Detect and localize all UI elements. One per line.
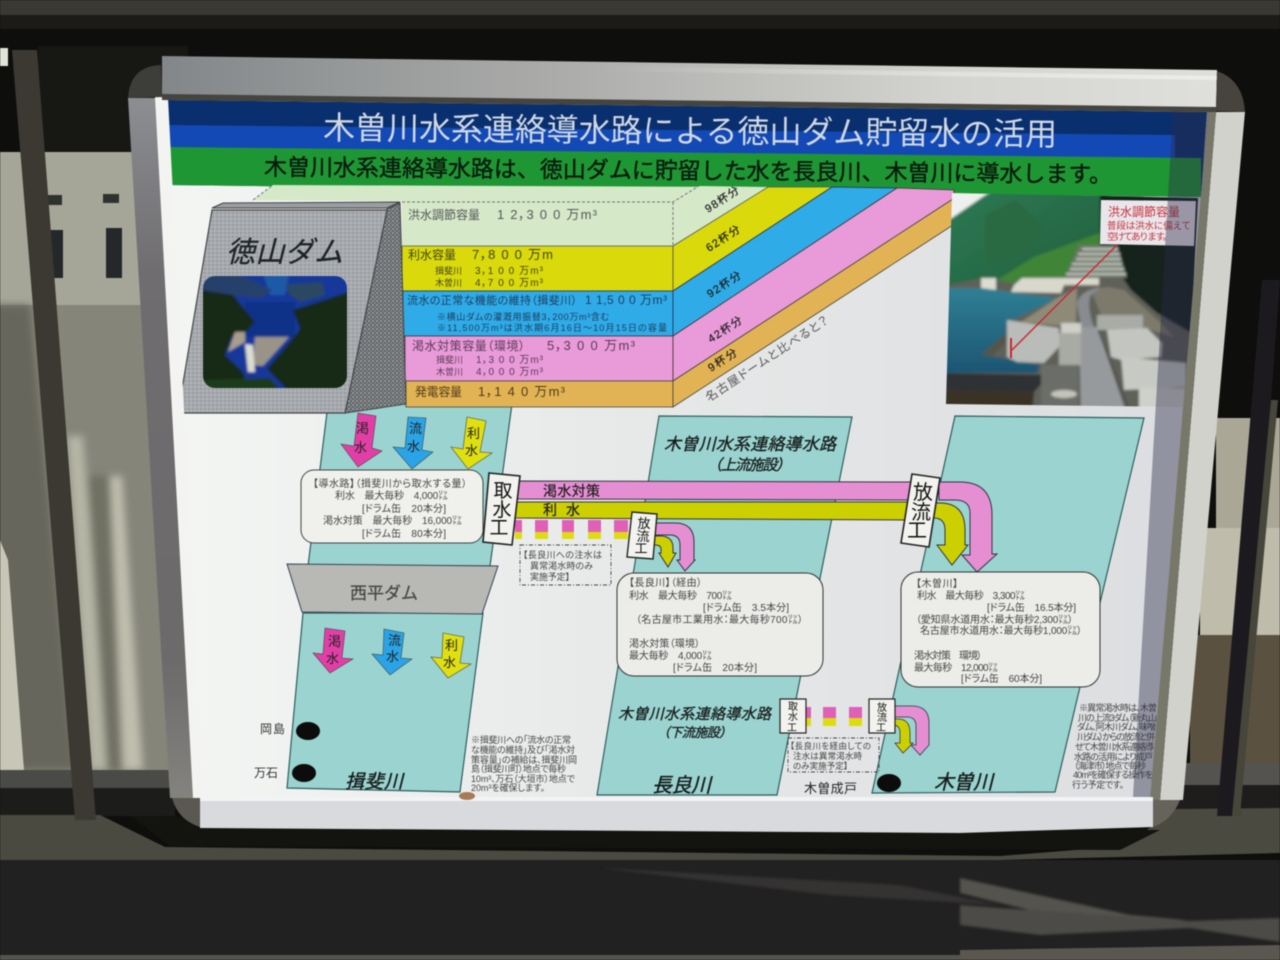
Kiso River info box: 渇水対策 環境）	[914, 649, 982, 662]
heading: upstream facilities: （上流施設）	[707, 457, 791, 474]
capacity labels: 4，7 0 0 万m³	[475, 278, 544, 289]
capacity labels: ※11,500万m³は洪水期6月16日～10月15日の容量	[437, 322, 667, 333]
capacity labels: 渇水対策容量（環境）	[412, 339, 525, 353]
outlet works box, Nagara	[627, 512, 657, 559]
Ibi River intake box: 利水 最大毎秒 4,000㍑	[335, 489, 448, 502]
conveyance channel pipes: 利 水	[543, 502, 580, 518]
dashed section toward Nagara River	[515, 520, 628, 539]
capacity labels: 揖斐川	[436, 354, 463, 365]
intake works box, lower: 取	[788, 702, 798, 713]
dam aerial photo	[202, 275, 348, 389]
Ibi River flow arrows, lower	[313, 628, 471, 678]
Ibi River intake box: 渇水対策 最大毎秒 16,000㍑	[323, 514, 462, 527]
outlet works box, Nagara: 流	[636, 529, 650, 544]
shadow cast by the right rail	[1133, 110, 1209, 797]
Nagara River info box: 渇水対策（環境）	[629, 637, 700, 650]
red arrow	[1011, 245, 1117, 358]
Nagara River info box: [ドラム缶 3.5本分]	[703, 601, 789, 614]
note: Kiso River supply: 行う予定です。	[1072, 779, 1124, 790]
note: Kiso River supply: 水路の活用により成戸	[1074, 751, 1153, 762]
Ibi River flow arrows, lower: 渇	[328, 634, 341, 649]
Ibi River flow arrows, lower: 水	[326, 651, 339, 666]
Tokuyama Dam block	[178, 202, 406, 413]
Ibi River flow arrows, upper: 流	[409, 421, 422, 436]
Kiso River info box: 最大毎秒 12,000㍑	[914, 661, 998, 674]
capacity labels: 1，3 0 0 万m³	[476, 355, 544, 366]
callout note	[1100, 200, 1196, 246]
note: Nagara River discharge: 異常渇水時のみ	[530, 560, 593, 571]
dam photo with flood capacity callout	[945, 192, 1198, 408]
Kiso River info box: 利水 最大毎秒 3,300㍑	[917, 589, 1025, 602]
Kiso River info box: [ドラム缶 16.5本分]	[987, 601, 1076, 614]
note: Ibi River supply: 策容量」の補給は、揖斐川岡	[471, 754, 577, 765]
capacity labels: 流水の正常な機能の維持（揖斐川）	[407, 293, 577, 307]
Ibi River intake box	[301, 470, 483, 543]
note: Kiso River supply: 40m³を確保する操作を	[1073, 769, 1153, 780]
Nagara River info box: （名古屋市工業用水：最大毎秒700㍑）	[636, 613, 803, 626]
note: Ibi River supply: 10m³、万石（大垣市）地点で	[471, 773, 575, 784]
heading: upstream facilities: 木曽川水系連絡導水路	[664, 435, 838, 454]
note: Ibi River supply: 島（揖斐川町）地点で毎秒	[471, 763, 566, 774]
note: Ibi River supply	[471, 734, 577, 793]
Nishihira Dam	[287, 564, 498, 614]
Kiso River info box: 名古屋市水道用水：最大毎秒1,000㍑）	[920, 624, 1082, 637]
capacity labels: 洪水調節容量	[408, 208, 480, 222]
observation points: 木曽成戸	[804, 781, 857, 796]
note: discharge via Nagara River	[788, 738, 879, 772]
note: Kiso River supply: 川ダム）からの放流と併	[1077, 731, 1155, 742]
capacity labels: 1，1 4 0 万m³	[478, 384, 566, 399]
outlet works box, Nagara: 放	[637, 516, 651, 531]
intake works box, lower: 水	[788, 711, 798, 723]
heading: downstream facilities: 木曽川水系連絡導水路	[618, 706, 773, 723]
callout note: 普段は洪水に備えて	[1107, 220, 1191, 232]
Ibi River flow arrows, lower: 水	[386, 649, 399, 664]
note: Kiso River supply: せて木曽川水系連絡導	[1075, 741, 1154, 752]
Nagoya Dome comparison labels: 92杯分	[704, 268, 744, 301]
river names: 木曽川	[934, 772, 995, 794]
Nishihira Dam: 西平ダム	[350, 584, 418, 603]
note: Kiso River supply	[1072, 702, 1157, 790]
note: discharge via Nagara River: のみ実施予定】	[793, 761, 848, 771]
capacity labels: 木曽川	[435, 277, 462, 288]
intake works box, lower: 工	[787, 723, 797, 734]
outlet works box, lower: 工	[876, 723, 886, 734]
Nagara River info box	[617, 573, 823, 676]
Nagoya Dome comparison labels: 名古屋ドームと比べると？	[702, 313, 831, 405]
Nagoya Dome comparison labels: 98杯分	[702, 183, 742, 216]
Ibi River flow arrows, upper: 水	[354, 440, 367, 455]
Nagara River outlet arrows	[652, 523, 695, 571]
capacity labels: 3，1 0 0 万m³	[475, 266, 544, 277]
river names: 揖斐川	[345, 772, 405, 793]
Nagoya Dome comparison labels: 42杯分	[705, 313, 745, 346]
outlet works box, Nagara: 工	[634, 541, 648, 556]
outlet works box, Kiso: 工	[907, 520, 927, 542]
river names: 長良川	[652, 775, 713, 797]
note: Kiso River supply: ※異常渇水時は、木曽	[1079, 702, 1157, 713]
Nagara River info box: 【長良川】（経由）	[629, 576, 702, 589]
Ibi River flow arrows, upper: 水	[407, 439, 420, 454]
Ibi River intake box: [ドラム缶 20本分]	[362, 502, 446, 515]
capacity labels: 利水容量	[408, 248, 456, 262]
note: Ibi River supply: ※揖斐川への「流水の正常	[471, 734, 571, 745]
Ibi River flow arrows, lower: 水	[443, 655, 456, 670]
heading: upstream facilities	[664, 435, 838, 474]
reservoir capacity stack	[253, 183, 954, 407]
conveyance channel pipes	[512, 481, 911, 520]
title: 木曽川水系連絡導水路による徳山ダム貯留水の活用	[323, 110, 1057, 152]
heading: downstream facilities	[618, 706, 773, 740]
note: Ibi River supply: 20m³を確保します。	[471, 782, 545, 793]
observation points: 万石	[254, 766, 278, 780]
Ibi River flow arrows, lower: 流	[388, 633, 401, 648]
intake works box: 取	[493, 481, 513, 502]
lower dashed section and arrows	[804, 706, 929, 755]
capacity labels: 4，0 0 0 万m³	[476, 367, 544, 378]
subtitle: 木曽川水系連絡導水路は、徳山ダムに貯留した水を長良川、木曽川に導水します。	[264, 154, 1112, 187]
heading: downstream facilities: （下流施設）	[657, 725, 732, 740]
capacity labels: ※横山ダムの灌漑用振替3，200万m³含む	[437, 311, 609, 322]
intake works box: 工	[489, 518, 509, 539]
callout note: 洪水調節容量	[1108, 205, 1180, 219]
Nagara River info box: [ドラム缶 20本分]	[673, 661, 757, 674]
rivers	[287, 404, 1144, 795]
capacity labels	[407, 207, 667, 399]
outlet works box, lower	[869, 699, 895, 734]
sign frame	[128, 56, 1245, 833]
outlet works box, Kiso	[901, 474, 940, 547]
Ibi River flow arrows, upper: 利	[467, 426, 480, 441]
observation points	[254, 721, 901, 796]
Ibi River intake box: [ドラム缶 80本分]	[362, 527, 446, 540]
river names	[345, 772, 995, 797]
Kiso River outlet arrows	[934, 482, 997, 572]
note: discharge via Nagara River: 【長良川を経由しての	[790, 741, 871, 751]
note: Nagara River discharge: 【長良川への注水は	[523, 549, 602, 560]
title band	[168, 100, 1207, 197]
callout note: 空けてあります。	[1107, 232, 1172, 243]
note: discharge via Nagara River: 注水は異常渇水時	[793, 751, 862, 761]
capacity labels: 木曽川	[436, 366, 463, 377]
Kiso River info box: （愛知県水道用水：最大毎秒2,300㍑）	[916, 613, 1073, 626]
capacity labels: 5，3 0 0 万m³	[547, 338, 636, 353]
note: Nagara River discharge: 実施予定】	[530, 571, 570, 582]
note: Kiso River supply: 川の上流3ダム（新丸山	[1078, 712, 1157, 723]
Kiso River info box: 【木曽川】	[916, 577, 958, 590]
note: Kiso River supply: （海津市）地点で毎秒	[1074, 760, 1146, 771]
dam name: 徳山ダム	[226, 237, 343, 269]
conveyance channel pipes: 渇水対策	[543, 483, 600, 499]
note: Kiso River supply: ダム、阿木川ダム、味噌	[1077, 721, 1156, 732]
Ibi River flow arrows, upper	[341, 413, 492, 469]
note: Ibi River supply: な機能の維持」及び「渇水対	[471, 744, 575, 755]
outlet works box, Kiso: 流	[911, 501, 931, 524]
capacity labels: 1 2，3 0 0 万m³	[497, 207, 598, 222]
Ibi River flow arrows, upper: 水	[465, 443, 478, 458]
Nagoya Dome comparison labels: 62杯分	[703, 222, 743, 255]
outlet works box, lower: 放	[877, 701, 887, 714]
capacity labels: 発電容量	[415, 385, 462, 399]
intake works box	[483, 473, 520, 545]
intake works box: 水	[492, 499, 512, 521]
Nagoya Dome comparison labels: 9杯分	[705, 345, 739, 375]
capacity labels: 1 1,5 0 0 万m³	[585, 293, 667, 307]
outlet works box, Kiso: 放	[913, 481, 933, 504]
Kiso River info box	[901, 572, 1100, 687]
Ibi River flow arrows, upper: 渇	[356, 421, 369, 436]
Ibi River intake box: 【導水路】（揖斐川から取水する量）	[313, 477, 467, 490]
Nagara River info box: 利水 最大毎秒 700㍑	[629, 589, 732, 602]
Nagara River info box: 最大毎秒 4,000㍑	[629, 649, 712, 662]
capacity labels: 揖斐川	[435, 265, 462, 276]
capacity labels: 7，8 0 0 万m	[472, 247, 553, 262]
observation points: 岡島	[260, 721, 285, 736]
Kiso River info box: [ドラム缶 60本分]	[961, 672, 1042, 685]
note: Nagara River discharge	[520, 545, 611, 585]
intake works box, lower	[780, 699, 806, 734]
outlet works box, lower: 流	[877, 712, 887, 724]
Ibi River flow arrows, lower: 利	[445, 638, 458, 653]
sign panel	[155, 97, 1208, 797]
Nagoya Dome comparison labels	[702, 183, 831, 405]
